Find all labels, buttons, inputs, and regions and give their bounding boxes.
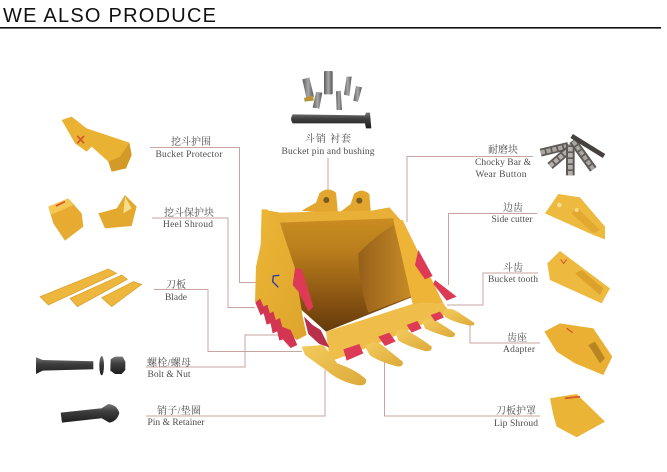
label: bucket pin and bushing: 斗销 衬套 xyxy=(305,132,351,145)
title: WE ALSO PRODUCE xyxy=(3,5,216,27)
label: adapter: 齿座 xyxy=(507,331,527,344)
label: bucket pin and bushing: Bucket pin and bushing xyxy=(282,147,375,157)
bucket teeth xyxy=(302,309,474,385)
label: bucket protector: Bucket Protector xyxy=(156,150,223,160)
label: bucket tooth: 斗齿 xyxy=(503,261,523,274)
label: pin and retainer: Pin & Retainer xyxy=(148,418,205,428)
label: bucket pin and bushing xyxy=(282,132,375,157)
label: bolt and nut: Bolt & Nut xyxy=(148,370,191,380)
bucket lugs xyxy=(302,189,371,220)
label: chocky bar and wear button: Wear Button xyxy=(476,170,527,180)
bucket interior xyxy=(280,218,413,332)
label: blade xyxy=(165,278,187,303)
label: bolt and nut xyxy=(147,356,191,380)
icon: bolt and nut xyxy=(36,356,125,375)
label: bucket tooth: Bucket tooth xyxy=(488,275,538,285)
left column parts xyxy=(36,117,142,423)
label: bolt and nut: 螺栓/螺母 xyxy=(147,356,191,369)
left side plate xyxy=(255,209,307,340)
label: chocky bar and wear button: Chocky Bar & xyxy=(475,158,532,168)
label: bucket protector xyxy=(156,135,223,160)
label: blade: Blade xyxy=(165,293,187,303)
long pin xyxy=(291,113,371,128)
label: bucket protector: 挖斗护围 xyxy=(171,135,211,148)
label: side cutter: Side cutter xyxy=(492,215,533,225)
left red side protectors xyxy=(293,268,329,347)
lip plate xyxy=(326,303,450,362)
icon: pin and retainer xyxy=(61,404,119,423)
leader lines xyxy=(146,148,540,416)
right column parts xyxy=(541,136,612,437)
icon: lip shroud xyxy=(550,394,605,437)
right red protectors xyxy=(415,250,457,301)
label: blade: 刀板 xyxy=(166,278,186,291)
top: bucket pin and bushing xyxy=(291,71,371,128)
label: heel shroud xyxy=(163,206,214,230)
label: adapter: Adapter xyxy=(503,345,536,355)
icon: bucket protector xyxy=(62,117,132,172)
label: lip shroud: 刀板护罩 xyxy=(496,404,536,417)
label: chocky bar and wear button xyxy=(475,143,532,180)
label: side cutter: 边齿 xyxy=(503,201,523,214)
main bucket illustration xyxy=(255,189,474,385)
right side plate xyxy=(393,220,443,304)
title underline xyxy=(0,27,661,29)
label: pin and retainer xyxy=(148,404,205,428)
label: chocky bar and wear button: 耐磨块 xyxy=(488,143,518,156)
interior right wall xyxy=(358,225,413,313)
label: adapter xyxy=(503,331,536,355)
label: heel shroud: Heel Shroud xyxy=(163,220,213,230)
label: bucket tooth xyxy=(488,261,538,285)
icon: heel shroud xyxy=(48,195,137,241)
label: lip shroud: Lip Shroud xyxy=(494,419,538,429)
lip shrouds xyxy=(343,312,444,361)
bushings xyxy=(302,71,362,110)
icon: blade xyxy=(40,269,142,307)
icon: adapter xyxy=(544,323,612,375)
bucket rim xyxy=(262,207,401,228)
icon: side cutter xyxy=(545,194,605,239)
label: heel shroud: 挖斗保护块 xyxy=(164,206,214,219)
icon: bucket tooth xyxy=(547,251,610,303)
label: pin and retainer: 销子/垫圈 xyxy=(157,404,201,417)
icon: chocky bar and wear button xyxy=(541,136,604,175)
label: side cutter xyxy=(492,201,533,225)
heel shrouds xyxy=(255,299,297,348)
label: lip shroud xyxy=(494,404,538,429)
side plate mark xyxy=(273,275,279,287)
